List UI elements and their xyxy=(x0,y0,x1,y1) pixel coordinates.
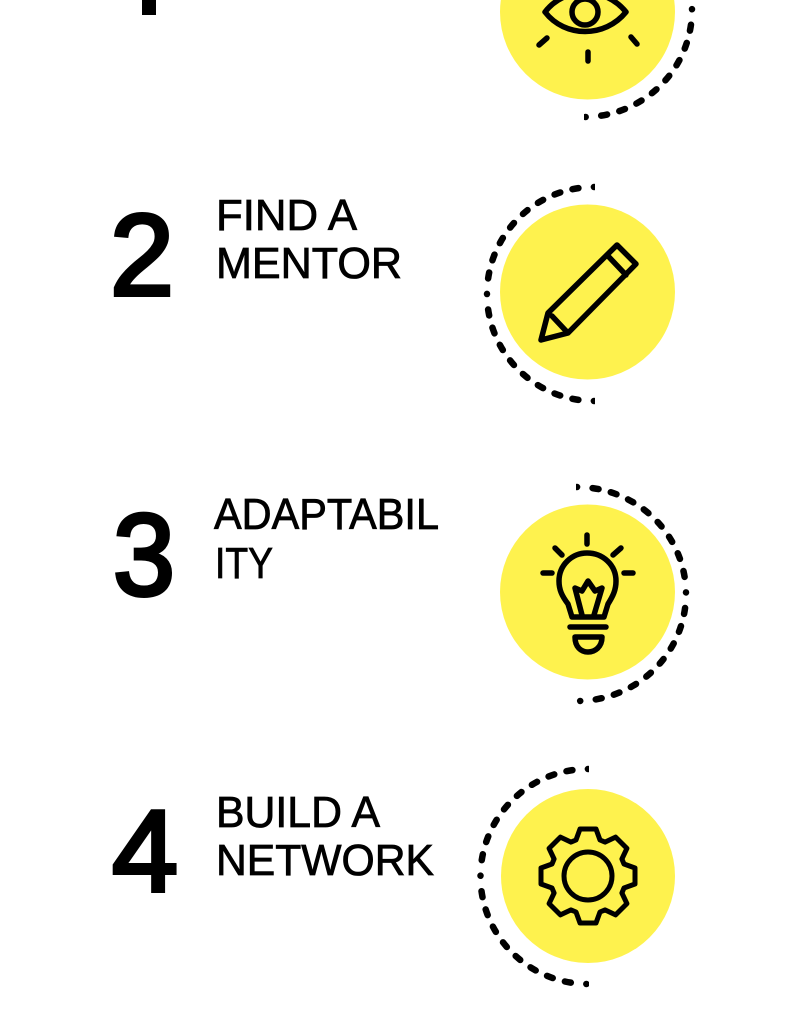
yellow circle 2 xyxy=(500,204,675,380)
label: find a mentor: MENTOR xyxy=(216,239,402,288)
step 4 xyxy=(112,769,675,984)
dashed arc 3 xyxy=(577,487,686,701)
label: adaptability xyxy=(214,490,439,588)
label: adaptability: ITY xyxy=(215,539,273,588)
number 2: 2 xyxy=(110,190,174,320)
yellow circle 1 xyxy=(500,0,675,100)
yellow circle 3 xyxy=(500,504,675,680)
label: adaptability: ADAPTABIL xyxy=(214,490,439,539)
dashed arc 4 xyxy=(480,769,588,984)
label: build a network xyxy=(216,788,434,885)
number 1 xyxy=(142,0,156,15)
label: find a mentor xyxy=(216,191,402,288)
icon: eye xyxy=(539,0,637,61)
yellow circle 4 xyxy=(501,789,675,963)
icon: light bulb xyxy=(543,535,633,652)
icon: pencil xyxy=(541,245,636,340)
step 3 xyxy=(113,487,686,701)
dashed arc 2 xyxy=(487,187,594,401)
step 1 xyxy=(115,0,692,117)
icon: gear xyxy=(541,829,635,923)
step 2 xyxy=(110,187,675,401)
label: build a network: BUILD A xyxy=(216,788,381,837)
label: build a network: NETWORK xyxy=(216,836,434,885)
number 3: 3 xyxy=(113,490,175,620)
label: find a mentor: FIND A xyxy=(216,191,358,240)
number 4: 4 xyxy=(112,786,178,916)
dashed arc 1 xyxy=(584,0,692,117)
